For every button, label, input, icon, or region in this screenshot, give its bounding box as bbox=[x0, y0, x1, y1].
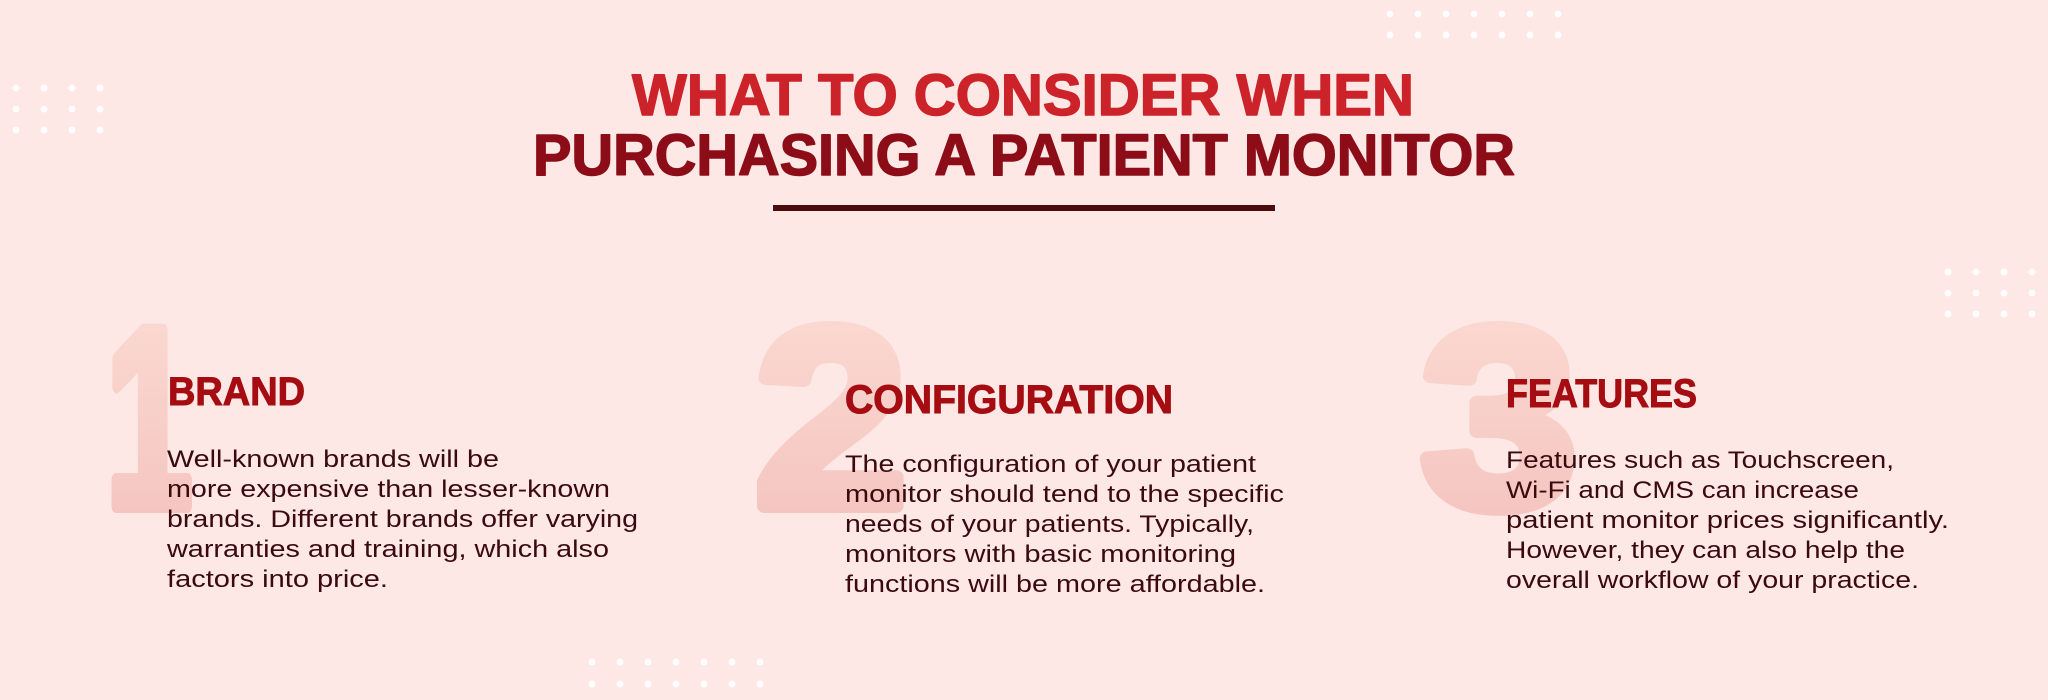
body: features: patient monitor prices significantly. bbox=[1506, 507, 1949, 534]
body: features: overall workflow of your practice. bbox=[1506, 567, 1919, 594]
number 3: 3 bbox=[1421, 276, 1577, 561]
body: features: Wi-Fi and CMS can increase bbox=[1506, 477, 1859, 504]
body: configuration bbox=[845, 451, 1284, 598]
body: brand: warranties and training, which also bbox=[166, 536, 609, 563]
panel: configuration bbox=[755, 276, 1284, 598]
title: WHAT TO CONSIDER WHEN bbox=[632, 63, 1414, 128]
heading: configuration: CONFIGURATION bbox=[845, 378, 1173, 422]
body: brand bbox=[166, 446, 638, 593]
body: configuration: monitors with basic monitoring bbox=[845, 541, 1236, 568]
body: brand: more expensive than lesser-known bbox=[167, 476, 610, 503]
body: configuration: functions will be more affordable. bbox=[845, 571, 1265, 598]
title underline bbox=[773, 205, 1275, 211]
panel: brand bbox=[106, 276, 638, 593]
body: brand: factors into price. bbox=[167, 566, 388, 593]
body: features: However, they can also help the bbox=[1506, 537, 1905, 564]
body: configuration: needs of your patients. Typically, bbox=[845, 511, 1254, 538]
body: features: Features such as Touchscreen, bbox=[1506, 447, 1894, 474]
number 2: 2 bbox=[755, 276, 907, 561]
heading: brand: BRAND bbox=[168, 370, 305, 414]
body: configuration: monitor should tend to the specific bbox=[845, 481, 1284, 508]
body: features bbox=[1506, 447, 1949, 594]
body: brand: Well-known brands will be bbox=[167, 446, 499, 473]
title bbox=[533, 63, 1515, 188]
panel: features bbox=[1421, 276, 1949, 594]
body: brand: brands. Different brands offer varying bbox=[167, 506, 638, 533]
body: configuration: The configuration of your patient bbox=[845, 451, 1256, 478]
number 1: 1 bbox=[106, 276, 192, 561]
heading: features: FEATURES bbox=[1506, 372, 1697, 416]
title: PURCHASING A PATIENT MONITOR bbox=[533, 123, 1515, 188]
